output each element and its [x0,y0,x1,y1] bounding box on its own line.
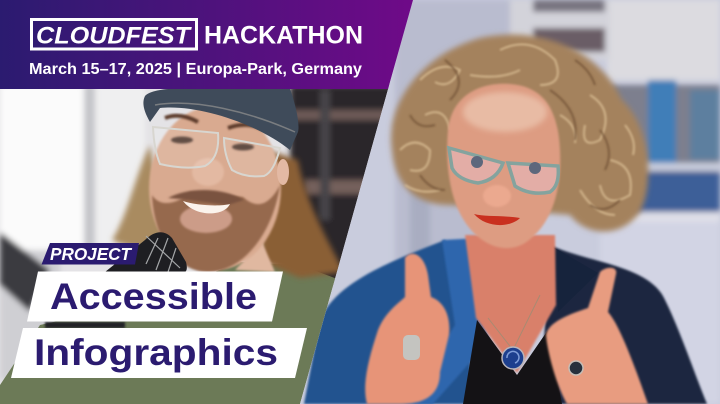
title bar: Infographics [11,328,307,378]
title bar: Accessible [27,272,283,322]
eyes [171,136,254,150]
mouth and teeth [183,201,230,213]
event date and place: March 15–17, 2025 | Europa-Park, Germany [29,61,362,78]
ring [569,361,583,375]
face [149,106,281,270]
chest and neck [465,235,556,373]
shirt [0,262,340,404]
hair [112,145,344,278]
photo: woman giving two thumbs up [300,0,720,404]
heading: Hackathon: HACKATHON [204,22,363,50]
cap [143,89,299,150]
logo box: CloudFest: CLOUDFEST [36,22,192,50]
nose [192,158,224,186]
neck [235,242,275,272]
lips [474,214,520,225]
title bar: Accessible: Accessible [50,276,257,317]
right hand thumb up [546,268,648,404]
hair [391,35,648,232]
title bar: Infographics: Infographics [34,332,278,373]
jacket [304,238,707,404]
nose [483,185,511,207]
tag: project: PROJECT [50,244,132,264]
photo: man with cap and microphone [0,80,390,404]
glasses [153,127,280,176]
ring [403,335,420,360]
black top [463,320,562,404]
header banner [0,0,413,89]
face [447,84,560,248]
left hand thumb up [365,254,449,404]
beard [152,185,280,272]
eyebrows [165,116,268,132]
necklace and pendant [488,295,540,369]
microphone [105,232,187,272]
glasses [449,148,558,193]
